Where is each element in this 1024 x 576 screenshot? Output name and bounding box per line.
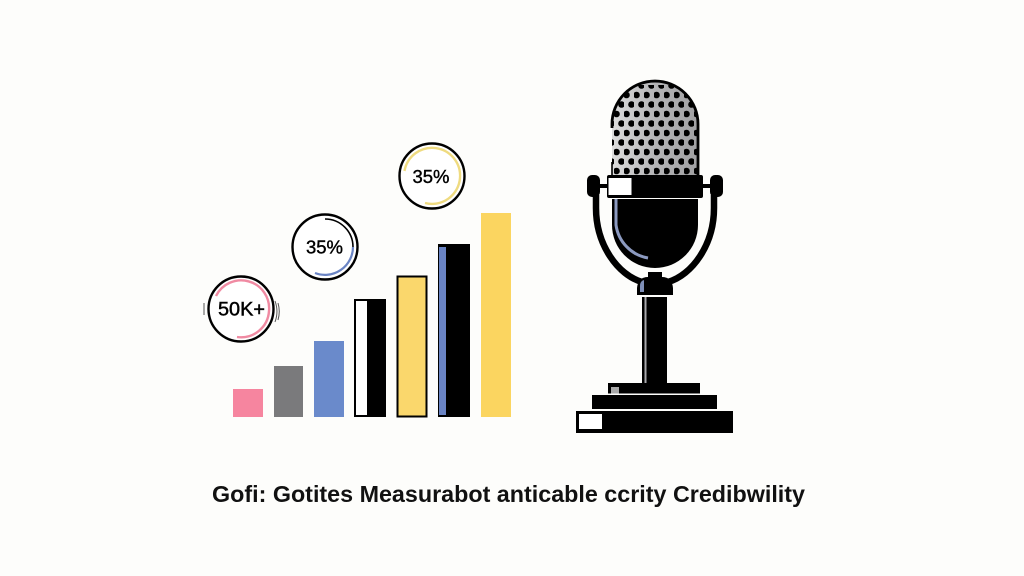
mic grille [612, 81, 698, 176]
stat badge: 35% top: 35% [412, 167, 450, 187]
mic pole [642, 297, 667, 383]
bar: black and blue [438, 244, 470, 417]
mic collar [637, 272, 673, 295]
bar: white and black [354, 299, 386, 417]
stat badge: 35% middle [292, 214, 358, 280]
bar: pink [233, 389, 263, 417]
stat badge: 50K+: 50K+ [218, 300, 265, 320]
mic yoke [596, 186, 714, 282]
stat badge: 35% middle: 35% [306, 238, 343, 258]
stat badge: 35% top [400, 144, 464, 208]
mic body [612, 199, 698, 268]
bar: gray [274, 366, 303, 417]
caption: Gofi: Gotites Measurabot anticable ccrity Credibwility [212, 481, 805, 507]
icon: microphone [576, 81, 733, 433]
infographic canvas [204, 80, 805, 507]
bar: blue [314, 341, 344, 417]
bar: outlined yellow [398, 276, 426, 416]
mic band [607, 175, 703, 198]
stat badge: 50K+ [204, 276, 279, 342]
bar: yellow [481, 213, 511, 417]
mic base [576, 383, 733, 433]
bar chart [233, 213, 511, 417]
mic yoke knobs [587, 175, 723, 197]
